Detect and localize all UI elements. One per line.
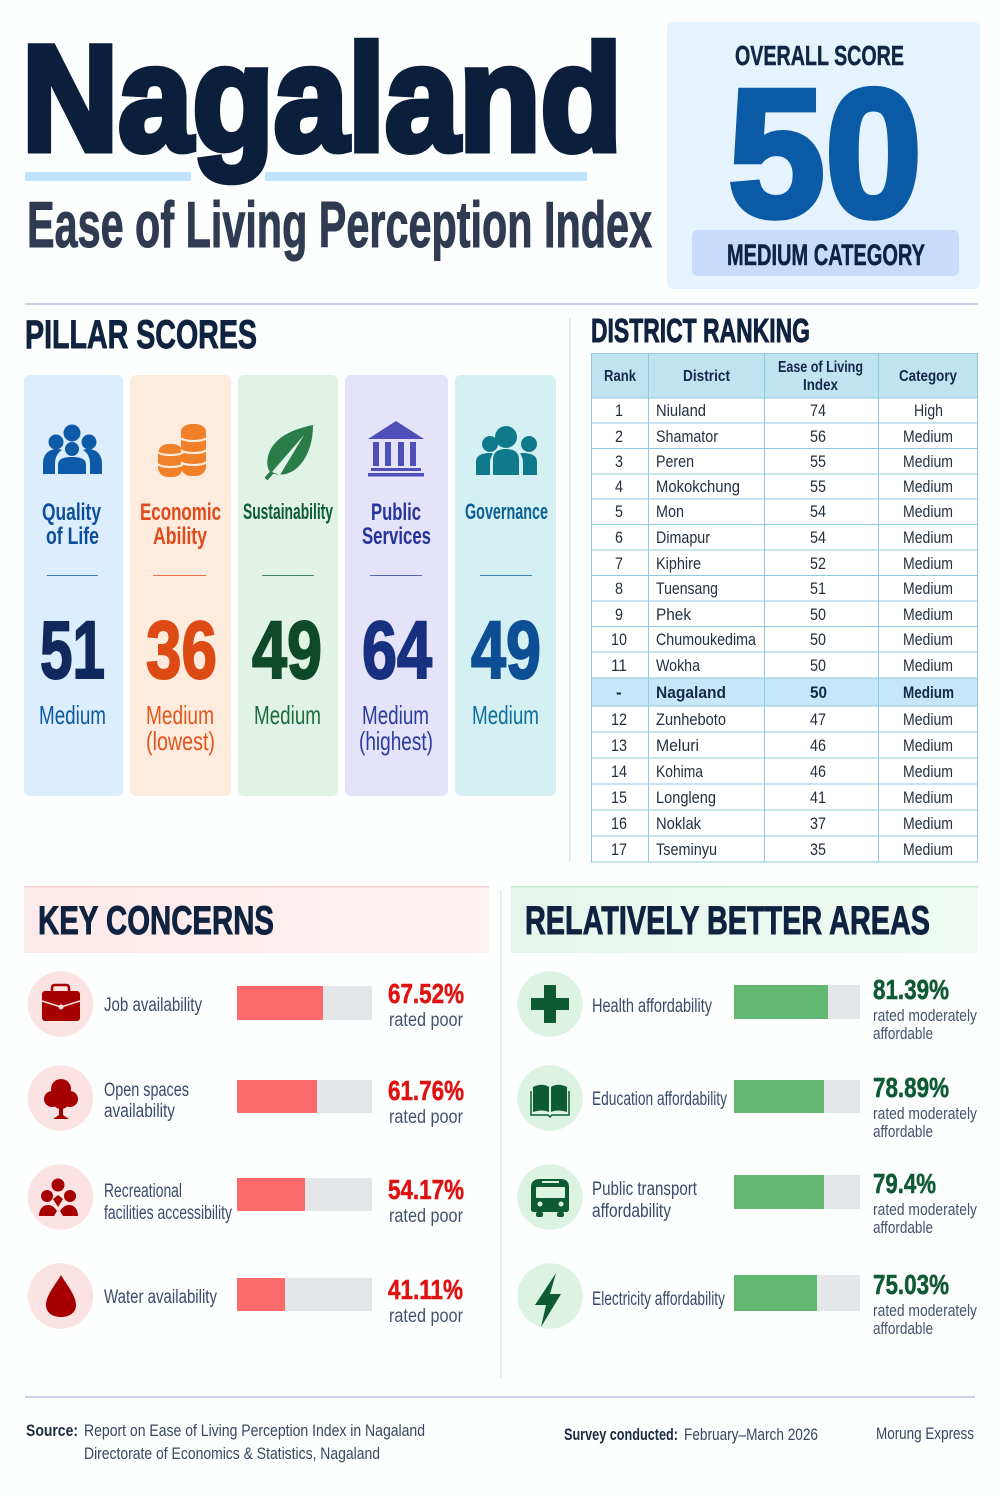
table rows: Medium: [903, 605, 953, 624]
table rows: Zunheboto: [656, 710, 726, 729]
table rows: 55: [810, 477, 826, 496]
table rows: Medium: [903, 814, 953, 833]
table rows: Medium: [903, 710, 953, 729]
rating: (highest): [359, 726, 433, 756]
panel: overall score: [667, 22, 980, 289]
section: key concerns: [24, 886, 489, 1329]
row: health affordability: [517, 971, 977, 1043]
icon: tree: [44, 1079, 78, 1119]
bar: [734, 985, 860, 1019]
table rows: Tuensang: [656, 579, 718, 598]
table rows: Medium: [903, 579, 953, 598]
row: recreational facilities: 54.17%: [388, 1174, 464, 1205]
bar: [734, 1175, 860, 1209]
icon: coins: [158, 424, 206, 477]
table header: Index: [803, 377, 838, 394]
row: recreational facilities: [28, 1164, 464, 1230]
icon: people: [43, 424, 102, 474]
table rows: Medium: [903, 427, 953, 446]
row: open spaces availability: Open spaces: [104, 1080, 189, 1101]
row: job availability: Job availability: [104, 995, 202, 1016]
table rows: Niuland: [656, 401, 706, 420]
row: public transport affordability: 79.4%: [873, 1168, 936, 1199]
table rows: Kiphire: [656, 554, 701, 573]
bar: [237, 1080, 372, 1113]
table row: Nagaland highlight: -: [616, 683, 622, 702]
table rows: 46: [810, 736, 826, 755]
table rows: 37: [810, 814, 826, 833]
rating: Medium: [146, 700, 214, 730]
row: public transport affordability: affordable: [873, 1218, 933, 1237]
section: district ranking: [591, 312, 978, 862]
row: job availability: 67.52%: [388, 978, 464, 1009]
table rows: 4: [615, 477, 623, 496]
overall score number: 50: [728, 51, 922, 255]
table rows: Kohima: [656, 762, 703, 781]
table rows: Noklak: [656, 814, 701, 833]
table rows: 54: [810, 502, 826, 521]
table rows: 13: [611, 736, 627, 755]
footer: [26, 1421, 974, 1463]
table rows: 55: [810, 452, 826, 471]
row: health affordability: affordable: [873, 1024, 933, 1043]
table rows: 50: [810, 605, 826, 624]
table rows: 5: [615, 502, 623, 521]
heading: pillar scores: PILLAR SCORES: [25, 313, 257, 357]
label: Public: [371, 499, 421, 526]
table rows: Wokha: [656, 656, 700, 675]
row: electricity affordability: Electricity affordability: [592, 1289, 725, 1310]
label: Services: [362, 523, 431, 550]
heading banner: key concerns: KEY CONCERNS: [38, 899, 274, 943]
panel: public services: [345, 375, 448, 796]
row: health affordability: Health affordability: [592, 996, 712, 1017]
source: Directorate of Economics & Statistics, Nagaland: [84, 1444, 380, 1463]
table rows: Shamator: [656, 427, 718, 446]
table rows: Peren: [656, 452, 694, 471]
rating: Medium: [362, 700, 429, 730]
survey date: [564, 1425, 818, 1444]
panel: sustainability: [238, 375, 338, 796]
table rows: Medium: [903, 528, 953, 547]
table rows: 12: [611, 710, 627, 729]
rating: Medium: [254, 700, 321, 730]
table rows: 47: [810, 710, 826, 729]
rating: Medium: [39, 700, 106, 730]
label: [42, 499, 101, 550]
table rows: 46: [810, 762, 826, 781]
bar: [237, 986, 372, 1020]
row: open spaces availability: [28, 1065, 464, 1131]
table rows: Medium: [903, 736, 953, 755]
icon: bus: [531, 1179, 569, 1217]
table row: Nagaland highlight: Medium: [903, 683, 954, 702]
row: water availability: 41.11%: [388, 1274, 463, 1305]
table header: Rank: [604, 368, 636, 385]
label: of Life: [46, 523, 99, 550]
table rows: 51: [810, 579, 826, 598]
row: open spaces availability: rated poor: [389, 1107, 464, 1128]
table rows: Mokokchung: [656, 477, 740, 496]
table row: Nagaland highlight: Nagaland: [656, 683, 726, 702]
icon: people group: [39, 1178, 78, 1216]
row: recreational facilities: Recreational: [104, 1181, 182, 1202]
bar: [237, 1178, 372, 1211]
table header: District: [683, 368, 731, 385]
table rows: Meluri: [656, 736, 699, 755]
table rows: 56: [810, 427, 826, 446]
table row: Nagaland highlight: 50: [810, 683, 827, 702]
table rows: Phek: [656, 605, 691, 624]
icon: briefcase: [42, 985, 80, 1021]
bar: [237, 1278, 372, 1311]
rating: Medium: [472, 700, 539, 730]
table rows: 15: [611, 788, 627, 807]
table rows: 17: [611, 840, 627, 859]
table rows: 2: [615, 427, 623, 446]
rating: [146, 700, 215, 756]
table: district ranking: [591, 353, 978, 862]
label: [140, 499, 221, 550]
icon: water drop: [46, 1275, 76, 1317]
publisher: Morung Express: [876, 1424, 974, 1443]
row: water availability: Water availability: [104, 1287, 217, 1308]
table row: Nagaland highlight: [616, 683, 954, 702]
panel: quality of life: [24, 375, 123, 796]
source: Source:: [26, 1421, 78, 1440]
table rows: Longleng: [656, 788, 716, 807]
table rows: 41: [810, 788, 826, 807]
score: 36: [146, 605, 217, 696]
row: public transport affordability: [517, 1164, 977, 1237]
row: water availability: rated poor: [389, 1306, 464, 1327]
row: recreational facilities: rated poor: [389, 1206, 464, 1227]
score: 64: [362, 605, 432, 696]
row: job availability: [28, 971, 464, 1037]
rating: [359, 700, 433, 756]
row: water availability: [28, 1263, 464, 1329]
table rows: 10: [611, 630, 627, 649]
table rows: Medium: [903, 788, 953, 807]
row: open spaces availability: availability: [104, 1101, 175, 1122]
label: Governance: [465, 499, 548, 524]
table rows: 74: [810, 401, 826, 420]
icon: book: [531, 1085, 569, 1117]
table header: Category: [899, 368, 957, 385]
row: electricity affordability: 75.03%: [873, 1269, 949, 1300]
section: relatively better areas: [511, 886, 978, 1338]
table rows: Dimapur: [656, 528, 710, 547]
heading: district ranking: DISTRICT RANKING: [591, 312, 810, 349]
row: electricity affordability: affordable: [873, 1319, 933, 1338]
row: education affordability: Education affordability: [592, 1089, 727, 1110]
table rows: 50: [810, 656, 826, 675]
table rows: Medium: [903, 656, 953, 675]
table rows: 35: [810, 840, 826, 859]
overall score label: OVERALL SCORE: [735, 40, 904, 71]
table rows: 16: [611, 814, 627, 833]
icon: plus: [531, 985, 569, 1023]
score: 51: [40, 605, 105, 696]
panel: governance: [455, 375, 556, 796]
icon: lightning bolt: [535, 1273, 561, 1327]
table rows: Medium: [903, 554, 953, 573]
score: 49: [471, 605, 541, 696]
row: open spaces availability: 61.76%: [388, 1075, 464, 1106]
table rows: 50: [810, 630, 826, 649]
rating: (lowest): [146, 726, 215, 756]
table rows: Medium: [903, 762, 953, 781]
label: Ability: [153, 523, 207, 550]
table rows: High: [914, 401, 943, 420]
table rows: 6: [615, 528, 623, 547]
survey date: February–March 2026: [684, 1425, 818, 1444]
subtitle: Ease of Living Perception Index: [27, 188, 652, 261]
table rows: [611, 401, 953, 859]
row: health affordability: 81.39%: [873, 974, 949, 1005]
table rows: 54: [810, 528, 826, 547]
table rows: Medium: [903, 502, 953, 521]
table rows: 7: [615, 554, 623, 573]
source: Report on Ease of Living Perception Index in Nagaland: [84, 1421, 425, 1440]
table rows: Medium: [903, 630, 953, 649]
table rows: Tseminyu: [656, 840, 717, 859]
category badge: [692, 230, 959, 276]
row: education affordability: 78.89%: [873, 1072, 949, 1103]
icon: leaf: [266, 425, 313, 479]
table rows: 1: [615, 401, 623, 420]
table rows: Medium: [903, 477, 953, 496]
heading banner: key concerns: [24, 886, 489, 953]
row: public transport affordability: rated moderately: [873, 1200, 977, 1219]
source: [26, 1421, 425, 1463]
score: 49: [252, 605, 322, 696]
section: pillar scores: [24, 313, 556, 796]
row: electricity affordability: rated moderately: [873, 1301, 977, 1320]
table rows: 11: [611, 656, 627, 675]
label: Economic: [140, 499, 221, 526]
label: [362, 499, 431, 550]
row: health affordability: rated moderately: [873, 1006, 977, 1025]
title: Nagaland: Nagaland: [22, 14, 622, 182]
table header: [604, 359, 957, 394]
table rows: 3: [615, 452, 623, 471]
label: Quality: [42, 499, 101, 526]
icon: temple: [368, 421, 424, 476]
bar: [734, 1080, 860, 1113]
table rows: 52: [810, 554, 826, 573]
bar: [734, 1275, 860, 1311]
table rows: Medium: [903, 840, 953, 859]
row: public transport affordability: Public transport: [592, 1179, 698, 1200]
table rows: Medium: [903, 452, 953, 471]
table header: Ease of Living: [778, 359, 863, 376]
row: education affordability: affordable: [873, 1122, 933, 1141]
row: job availability: rated poor: [389, 1010, 464, 1031]
table rows: 8: [615, 579, 623, 598]
row: education affordability: [517, 1065, 977, 1141]
icon: group: [476, 426, 537, 475]
row: public transport affordability: affordability: [592, 1201, 671, 1222]
row: education affordability: rated moderately: [873, 1104, 977, 1123]
header: title block: [22, 14, 652, 261]
label: Sustainability: [243, 499, 333, 524]
table rows: 9: [615, 605, 623, 624]
table rows: 14: [611, 762, 627, 781]
heading banner: better areas: [511, 886, 978, 953]
panel: economic ability: [130, 375, 231, 796]
survey date: Survey conducted:: [564, 1425, 678, 1444]
table rows: Chumoukedima: [656, 630, 756, 649]
table rows: Mon: [656, 502, 684, 521]
row: recreational facilities: facilities accessibility: [104, 1203, 232, 1224]
row: electricity affordability: [517, 1263, 977, 1338]
